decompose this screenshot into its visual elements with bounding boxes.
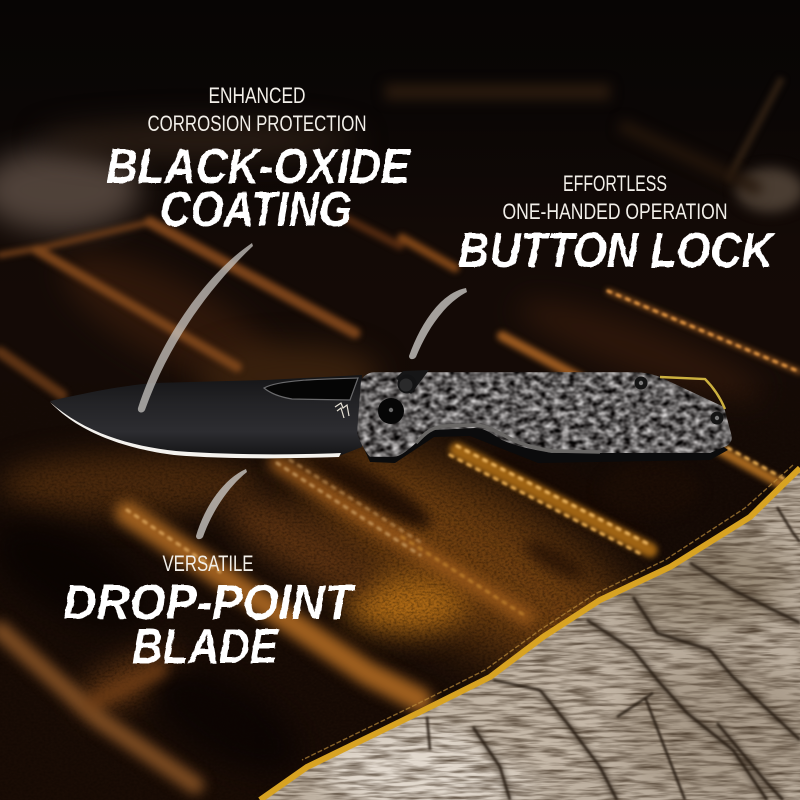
pointer line	[196, 469, 247, 539]
leather grain	[3, 448, 644, 716]
handle screws	[634, 376, 724, 424]
pivot screw	[378, 398, 404, 424]
gold pocket clip	[660, 377, 725, 409]
callout: black-oxide coating: COATING	[160, 183, 352, 237]
knife	[50, 370, 732, 463]
blurred upper scene	[385, 84, 610, 100]
blade thumb slot	[264, 378, 358, 400]
kicker text: ENHANCED	[208, 83, 306, 108]
dark leather patches	[2, 522, 136, 622]
leather yellow edge	[260, 465, 800, 800]
callout: button lock: ONE-HANDED OPERATION	[502, 199, 728, 224]
kicker text: EFFORTLESS	[563, 171, 667, 196]
callout: drop-point blade: BLADE	[132, 620, 279, 674]
handle liner	[416, 425, 600, 452]
callout: black-oxide coating: CORROSION PROTECTION	[148, 111, 366, 136]
blade edge highlight	[50, 402, 341, 458]
pointer line	[138, 243, 253, 412]
handle shadow body	[357, 400, 728, 463]
wood cracks	[427, 507, 800, 800]
kicker text: VERSATILE	[162, 551, 254, 576]
heading: DROP-POINT	[63, 576, 357, 630]
warm lower leather	[274, 437, 646, 680]
wood stump	[250, 460, 800, 800]
knife blade	[50, 375, 362, 458]
callout: drop-point blade	[63, 469, 357, 674]
carbon scale	[357, 372, 732, 457]
button lock	[396, 370, 429, 394]
callout: button lock	[409, 171, 776, 359]
knife handle	[357, 372, 732, 463]
pointer line	[409, 288, 467, 359]
leather stitching lines	[0, 218, 800, 785]
blade logo mark	[335, 403, 349, 418]
callout: black-oxide coating	[106, 83, 411, 412]
heading: BLACK-OXIDE	[106, 140, 411, 194]
